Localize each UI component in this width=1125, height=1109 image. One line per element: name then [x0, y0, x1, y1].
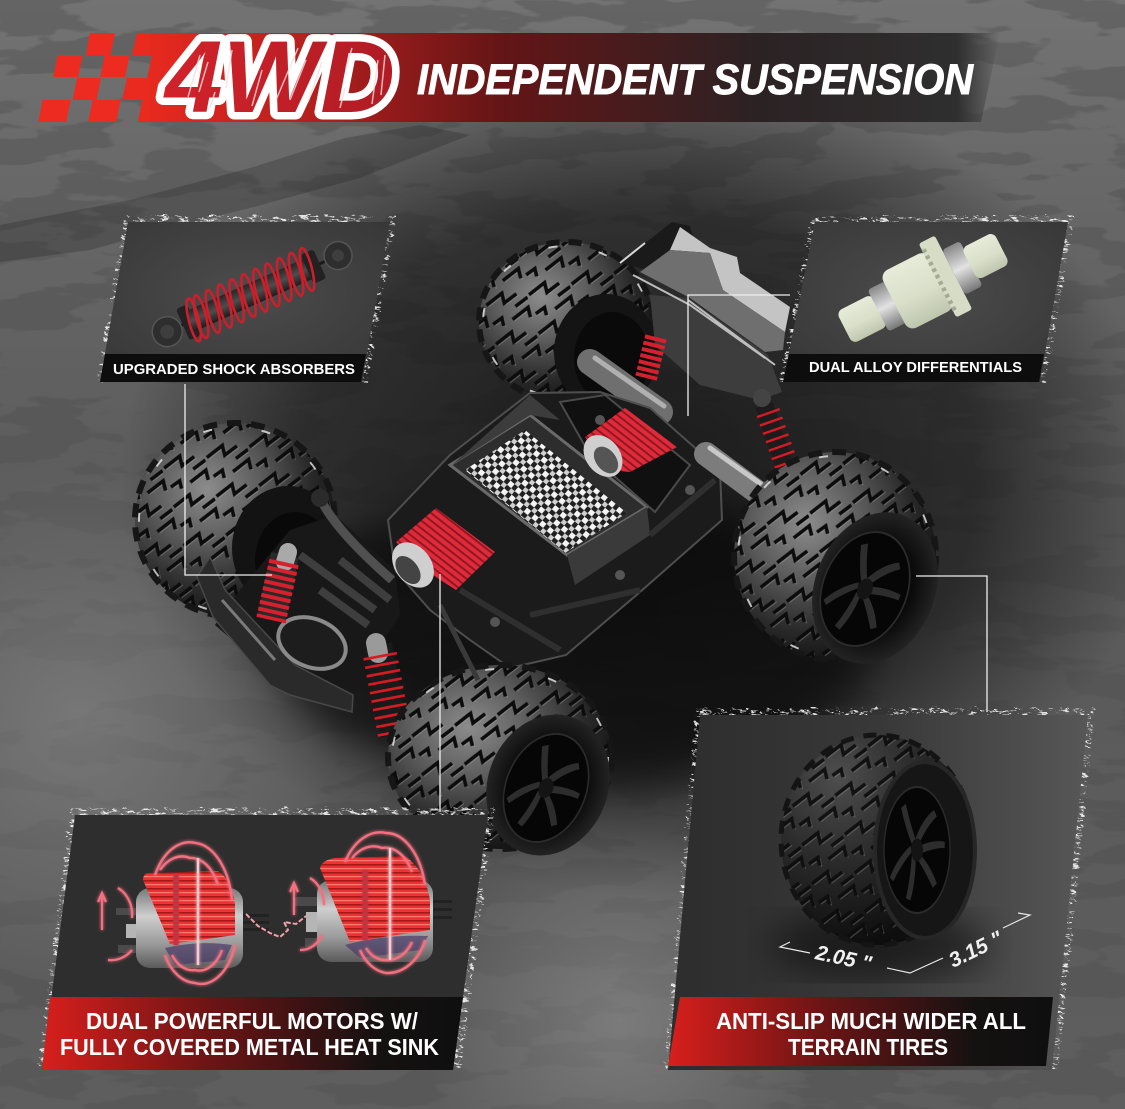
4WD logo: 4WD: [163, 20, 395, 134]
front bottom tire: [388, 665, 631, 874]
caption: differentials: [783, 354, 1044, 382]
steering link: [440, 605, 478, 680]
front left tire: [135, 423, 344, 617]
electric arc: [246, 914, 306, 937]
leader line: motors: [439, 574, 441, 812]
icon: right motor: [290, 832, 452, 973]
rear drive shaft: [590, 358, 664, 412]
front suspension assembly: [197, 489, 400, 712]
dimension: height: 3.15 ": [945, 927, 1007, 973]
rear wing: [620, 222, 790, 400]
caption: motors: [42, 997, 463, 1070]
front motor: [383, 508, 495, 596]
battery heat shield: [465, 430, 627, 553]
4WD logo: 4WD: [163, 20, 395, 134]
icon: differential gear: [826, 211, 1020, 365]
title banner: [38, 20, 1000, 134]
rear right tire: [734, 452, 960, 683]
caption: shock absorbers: UPGRADED SHOCK ABSORBERS: [113, 361, 355, 378]
panel: all terrain tires: [668, 712, 1090, 1070]
icon: left motor: [98, 842, 269, 984]
rear left tire: [479, 242, 658, 410]
rear axle: [706, 448, 772, 500]
dimension lines: [780, 913, 1030, 973]
dimension: width: 2.05 ": [812, 941, 875, 976]
leader line: differentials: [688, 295, 790, 416]
car shadow: [270, 490, 870, 790]
caption: tires: TERRAIN TIRES: [788, 1034, 948, 1060]
panel: dual motors: [42, 812, 490, 1070]
caption: tires: [668, 997, 1053, 1066]
icon: large tire: [781, 735, 975, 945]
leader line: shock absorbers: [185, 384, 272, 575]
panel: differentials: [783, 211, 1070, 382]
RC truck: [135, 222, 960, 874]
checkered flag: [38, 33, 134, 122]
leader line: tires: [916, 576, 987, 712]
panel: shock absorbers: [100, 219, 392, 382]
caption: tires: ANTI-SLIP MUCH WIDER ALL: [716, 1008, 1026, 1034]
caption: differentials: DUAL ALLOY DIFFERENTIALS: [809, 359, 1022, 376]
icon: shock absorber: [144, 229, 360, 358]
caption: shock absorbers: [100, 354, 366, 382]
chassis tub: [388, 392, 722, 668]
front left shock: [271, 552, 288, 620]
caption: motors: FULLY COVERED METAL HEAT SINK: [60, 1034, 439, 1060]
front right shock: [376, 643, 395, 735]
banner bar: [122, 33, 1000, 122]
rear motor: [575, 408, 677, 485]
caption: motors: DUAL POWERFUL MOTORS W/: [86, 1008, 419, 1034]
rear shocks: [646, 337, 790, 475]
title text: INDEPENDENT SUSPENSION: [417, 56, 974, 104]
tire floor shadow: [770, 913, 990, 977]
